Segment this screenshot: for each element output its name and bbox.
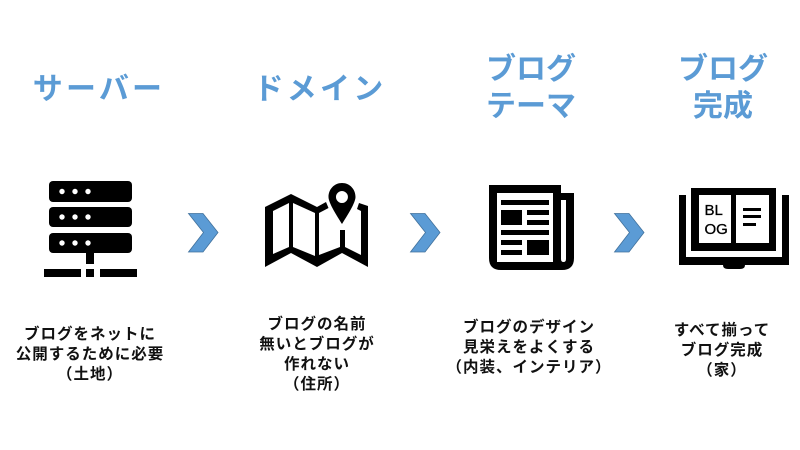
arrow: domain to theme: [410, 214, 440, 252]
icon: open book: [679, 188, 789, 269]
title: blog complete: [678, 52, 768, 123]
arrow: server to domain: [188, 214, 218, 252]
icon: newspaper: [489, 185, 574, 270]
text: server description: ブログをネットに: [24, 326, 156, 342]
text: server description: [16, 326, 164, 382]
text: server description: 公開するために必要: [16, 346, 164, 362]
text: complete description: ブログ完成: [681, 342, 763, 359]
title: blog theme: テーマ: [486, 90, 576, 123]
text: domain description: [259, 316, 375, 393]
title: blog theme: [486, 52, 576, 123]
text: domain description: 無いとブログが: [259, 336, 375, 353]
icon: open book: OG: [704, 221, 728, 238]
title: domain: ドメイン: [254, 73, 386, 106]
icon: map with pin: [265, 183, 368, 267]
text: domain description: （住所）: [284, 376, 350, 393]
text: theme description: [446, 318, 612, 376]
text: complete description: [674, 322, 770, 379]
icon: server: [44, 181, 137, 277]
arrow: theme to complete: [614, 214, 644, 252]
text: theme description: （内装、インテリア）: [446, 359, 612, 376]
text: complete description: すべて揃って: [674, 322, 770, 339]
title: blog complete: 完成: [693, 90, 753, 123]
text: server description: （土地）: [57, 366, 123, 382]
title: blog theme: ブログ: [486, 53, 576, 86]
icon: open book: BL: [704, 202, 723, 219]
title: blog complete: ブログ: [678, 53, 768, 86]
text: domain description: ブログの名前: [267, 316, 366, 333]
text: domain description: 作れない: [284, 356, 350, 373]
text: theme description: 見栄えをよくする: [463, 339, 595, 356]
text: complete description: （家）: [697, 362, 747, 379]
title: server: サーバー: [33, 73, 165, 106]
text: theme description: ブログのデザイン: [463, 319, 595, 336]
